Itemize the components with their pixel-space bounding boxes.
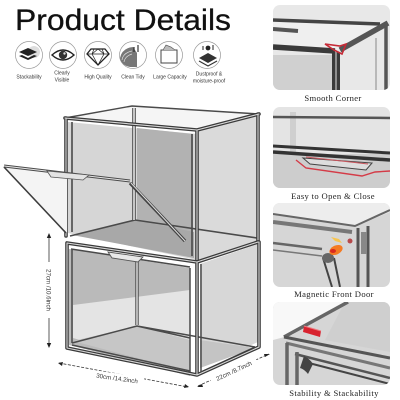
- icon: stackability: [16, 42, 42, 68]
- label: magnetic front door: Magnetic Front Door: [294, 289, 374, 299]
- dimension: height: [44, 233, 54, 348]
- dimension: depth: 22cm /8.7inch: [215, 360, 254, 383]
- icon labels: Large Capacity: [153, 74, 187, 80]
- icon: clean tidy: [120, 42, 146, 68]
- label: smooth corner: Smooth Corner: [304, 93, 362, 103]
- label: stability and stackability: Stability & Stackability: [289, 388, 379, 398]
- panel: stability and stackability: [273, 302, 390, 385]
- icon: dustproof and moisture-proof: [194, 42, 220, 68]
- label: easy to open and close: Easy to Open & Close: [291, 191, 375, 201]
- title: Product Details: [15, 4, 231, 37]
- icon: high quality diamond: [84, 42, 112, 68]
- dimension: height: 27cm /10.6inch: [44, 269, 52, 312]
- dimension: depth: [197, 354, 270, 387]
- lower box: [67, 242, 259, 376]
- upper box: [65, 106, 259, 260]
- panel: smooth corner: [273, 5, 390, 90]
- icon labels: Clearly: [54, 70, 70, 76]
- icon labels: [16, 70, 226, 84]
- icon labels: High Quality: [84, 74, 112, 80]
- panel: easy to open and close: [273, 107, 390, 188]
- icon: clearly visible eye: [50, 42, 76, 68]
- lower box handle: [108, 252, 143, 262]
- panel: magnetic front door: [273, 203, 390, 287]
- feature icons row: [16, 42, 226, 84]
- icon labels: moisture-proof: [193, 78, 226, 84]
- product: stacked transparent boxes: [3, 106, 259, 376]
- icon labels: Stackability: [16, 74, 42, 80]
- icon: large capacity: [156, 42, 182, 68]
- icon labels: Dustproof &: [196, 72, 223, 78]
- dimension: width: [58, 362, 189, 388]
- open front door: [3, 166, 185, 241]
- icon labels: Visible: [55, 78, 70, 84]
- door handle: [47, 171, 89, 180]
- icon labels: Clean Tidy: [121, 74, 145, 80]
- dimension: width: 30cm /14.2inch: [96, 373, 139, 385]
